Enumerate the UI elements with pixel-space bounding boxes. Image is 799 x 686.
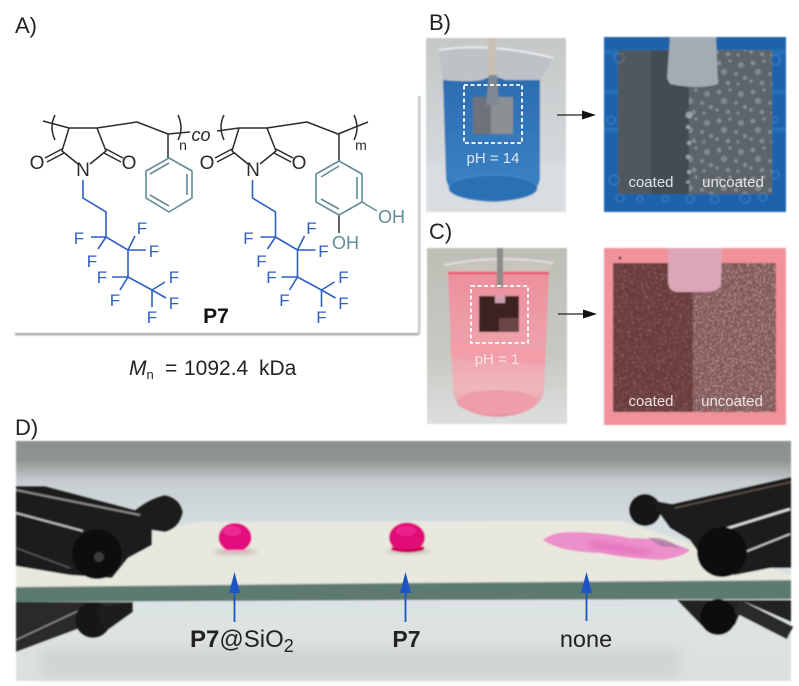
fluoroalkyl chain right: F: [279, 291, 290, 310]
atom labels: oxygen, nitrogen, co, subscripts: [30, 125, 367, 181]
atom labels: oxygen, nitrogen, co, subscripts: N: [76, 160, 90, 181]
molecular weight text: =: [165, 357, 177, 380]
fluoroalkyl chain left: F: [147, 308, 157, 327]
fluoroalkyl chain left: F: [87, 252, 97, 271]
left rollers: [16, 486, 183, 652]
hydroxyl labels: OH: [332, 233, 359, 253]
label uncoated: uncoated: [701, 393, 763, 410]
hydroxyl labels: OH: [378, 207, 405, 227]
atom labels: oxygen, nitrogen, co, subscripts: O: [30, 153, 44, 174]
photo: blue beaker pH 14: [426, 38, 566, 212]
panel label: D: D): [15, 415, 38, 440]
dashed selection box: [464, 85, 522, 143]
photo: closeup pH 14: [604, 37, 786, 212]
fluoroalkyl chain right: [243, 180, 349, 327]
panel label: B: B): [429, 10, 451, 35]
label coated: coated: [628, 174, 674, 191]
blue arrow: P7@SiO2: [229, 572, 240, 622]
label coated: coated: [628, 393, 674, 410]
panel frame: A: [15, 96, 420, 335]
compound label P7: P7: [203, 305, 229, 328]
label pH 1: pH = 1: [475, 351, 519, 368]
label uncoated: uncoated: [702, 174, 764, 191]
fluoroalkyl chain left: F: [149, 242, 159, 261]
panel label: C: C): [429, 219, 452, 244]
droplet on P7: [389, 522, 425, 552]
label none: none: [560, 626, 612, 652]
atom labels: oxygen, nitrogen, co, subscripts: n: [179, 137, 187, 153]
panel label: A: A): [15, 13, 37, 38]
phenyl ring: [146, 158, 192, 212]
fluoroalkyl chain right: F: [318, 242, 329, 261]
fluoroalkyl chain left: F: [169, 268, 179, 287]
molecular weight text: 1092.4: [184, 357, 249, 380]
right rollers: [629, 477, 791, 635]
spread pink stain on uncoated strip: [543, 532, 690, 560]
fluoroalkyl chain right: F: [338, 268, 349, 287]
label P7: P7: [392, 626, 421, 652]
molecular weight text: kDa: [259, 357, 297, 380]
atom labels: oxygen, nitrogen, co, subscripts: O: [200, 153, 214, 174]
panel: A chemical structure of P7: [15, 96, 420, 335]
arrow: B beaker to closeup: [557, 110, 596, 120]
label pH 14: pH = 14: [467, 150, 519, 167]
fluoroalkyl chain left: [74, 180, 179, 327]
fluoroalkyl chain right: F: [338, 294, 349, 313]
molecular weight text: n: [146, 367, 154, 382]
droplet on P7@SiO2: [218, 523, 252, 552]
blue arrow: P7: [400, 572, 411, 622]
coated paper strip: [16, 521, 791, 588]
fluoroalkyl chain left: F: [97, 268, 107, 287]
fluoroalkyl chain right: F: [243, 229, 254, 248]
photo: closeup pH 1: [604, 248, 786, 425]
dashed selection box: [471, 286, 528, 343]
atom labels: oxygen, nitrogen, co, subscripts: co: [191, 125, 211, 145]
photo: pink beaker pH 1: [427, 248, 567, 424]
fluoroalkyl chain left: F: [137, 219, 147, 238]
atom labels: oxygen, nitrogen, co, subscripts: m: [355, 137, 367, 153]
hydroxyl labels: [332, 207, 405, 253]
arrow: C beaker to closeup: [558, 310, 597, 318]
atom labels: oxygen, nitrogen, co, subscripts: O: [122, 153, 136, 174]
molecular weight text: M: [129, 357, 147, 380]
label P7@SiO2: P7@SiO: [190, 626, 284, 653]
polymer backbone and maleimide rings: [43, 115, 368, 233]
label P7@SiO2: 2: [284, 636, 294, 656]
photo: droplets on coated strip: [16, 441, 791, 681]
fluoroalkyl chain left: F: [110, 291, 120, 310]
atom labels: oxygen, nitrogen, co, subscripts: O: [292, 153, 306, 174]
atom labels: oxygen, nitrogen, co, subscripts: N: [246, 160, 260, 181]
fluoroalkyl chain right: F: [316, 308, 327, 327]
blue arrow: none: [581, 572, 592, 621]
droplet shadows: [213, 550, 257, 554]
fluoroalkyl chain left: F: [169, 294, 179, 313]
fluoroalkyl chain right: F: [266, 268, 277, 287]
fluoroalkyl chain right: F: [306, 219, 317, 238]
fluoroalkyl chain left: F: [74, 229, 84, 248]
fluoroalkyl chain right: F: [256, 252, 267, 271]
catechol ring: [316, 161, 377, 215]
